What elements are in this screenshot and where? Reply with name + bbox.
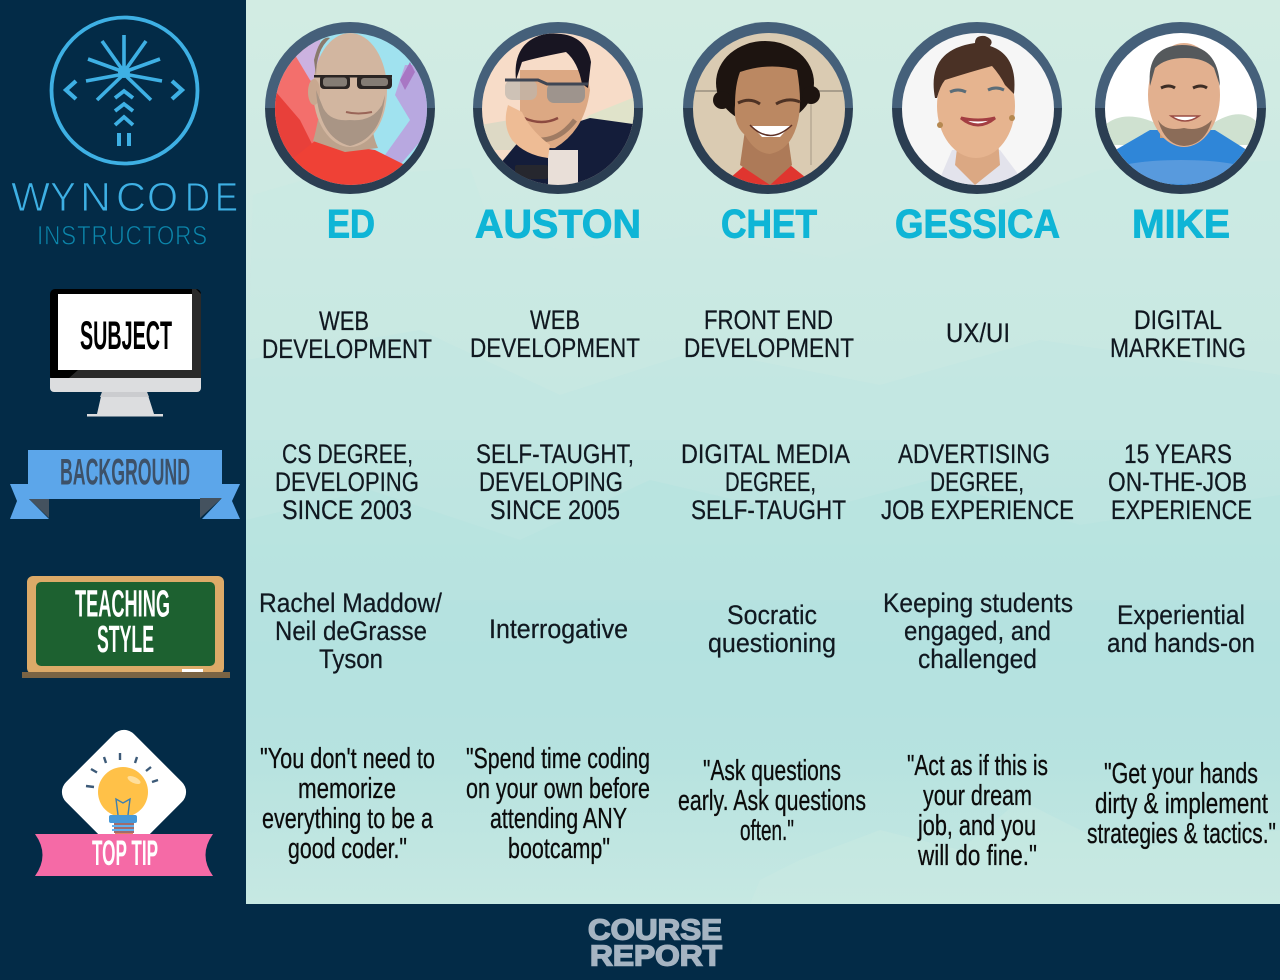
icon: ribbon, background heading [10, 450, 240, 519]
portrait: Ed [265, 22, 435, 194]
background: Chet [681, 439, 850, 525]
teaching style: Chet: Socratic [727, 600, 817, 630]
background: Chet: SELF-TAUGHT [691, 495, 846, 525]
top tip: Auston: bootcamp" [508, 833, 610, 865]
icon: lightbulb, top tip heading: TOP TIP [92, 834, 158, 873]
background: Gessica: ADVERTISING [898, 439, 1050, 469]
left sidebar [0, 0, 246, 904]
subject: Ed [262, 306, 432, 364]
icon: monitor, subject heading [50, 289, 201, 416]
instructor: Chet [683, 22, 853, 246]
logo emblem [52, 18, 198, 164]
background: Gessica: JOB EXPERIENCE [881, 495, 1074, 525]
Wyncode logo [11, 18, 238, 250]
background: Gessica [881, 439, 1074, 525]
logo wordmark [11, 174, 238, 220]
background: Auston: SELF-TAUGHT, [476, 439, 634, 469]
teaching style: Gessica: engaged, and [904, 616, 1051, 646]
background: Ed: CS DEGREE, [282, 439, 413, 469]
icon: chalkboard, teaching style heading: TEACHING [75, 584, 170, 626]
top tip: Chet [678, 755, 866, 847]
subject: Auston [470, 305, 640, 363]
logo wordmark: E [215, 174, 238, 220]
portrait: Auston [473, 22, 643, 194]
subject: Mike [1110, 305, 1246, 363]
icon: ribbon, background heading: BACKGROUND [60, 452, 190, 492]
subject: Mike: MARKETING [1110, 333, 1246, 363]
logo wordmark: D [185, 174, 210, 220]
top tip: Ed: memorize [298, 773, 396, 805]
name: Auston: AUSTON [475, 202, 641, 246]
top tip: Auston: "Spend time coding [466, 743, 650, 775]
logo subtitle: INSTRUCTORS [37, 220, 208, 250]
subject: Gessica: UX/UI [946, 318, 1010, 348]
background: Chet: DEGREE, [725, 467, 816, 497]
Course Report logo [588, 914, 722, 972]
logo wordmark: W [11, 174, 50, 220]
icon: chalkboard, teaching style heading [22, 576, 230, 678]
teaching style: Ed: Rachel Maddow/ [259, 588, 442, 618]
name: Mike: MIKE [1132, 202, 1230, 246]
teaching style: Auston: Interrogative [489, 614, 628, 644]
background: Gessica: DEGREE, [930, 467, 1024, 497]
subject: Chet: FRONT END [704, 305, 833, 335]
icon: monitor, subject heading: SUBJECT [80, 314, 172, 358]
subject: Mike: DIGITAL [1134, 305, 1222, 335]
instructor: Ed [265, 22, 435, 246]
subject: Auston: DEVELOPMENT [470, 333, 640, 363]
background: Chet: DIGITAL MEDIA [681, 439, 850, 469]
background: Auston: DEVELOPING [479, 467, 623, 497]
background: Mike: ON-THE-JOB [1108, 467, 1247, 497]
background: Mike: EXPERIENCE [1111, 495, 1252, 525]
name: Ed: ED [327, 202, 375, 246]
logo wordmark: Y [50, 174, 76, 220]
top tip: Ed: everything to be a [262, 803, 434, 835]
background: Ed: DEVELOPING [275, 467, 419, 497]
instructor: Auston [473, 22, 643, 246]
background: Auston [476, 439, 634, 525]
subject: Ed: WEB [319, 306, 369, 336]
row: subject [262, 305, 1246, 364]
teaching style: Chet: questioning [708, 628, 836, 658]
top tip: Gessica: "Act as if this is [907, 750, 1048, 782]
teaching style: Mike [1107, 600, 1255, 658]
Course Report logo: COURSE [588, 914, 722, 946]
top tip: Chet: often." [740, 815, 794, 847]
top tip: Chet: early. Ask questions [678, 785, 866, 817]
teaching style: Mike: and hands-on [1107, 628, 1255, 658]
footer bar [0, 904, 1280, 980]
top tip: Ed: "You don't need to [260, 743, 435, 775]
top tip: Gessica [907, 750, 1048, 872]
logo wordmark: N [80, 174, 111, 220]
portrait: Mike [1095, 22, 1266, 194]
background: Ed [275, 439, 419, 525]
background: Ed: SINCE 2003 [282, 495, 412, 525]
subject: Chet [684, 305, 854, 363]
top tip: Auston: on your own before [466, 773, 650, 805]
teaching style: Ed: Neil deGrasse [275, 616, 427, 646]
portrait: Chet [683, 22, 853, 194]
background: Mike [1108, 439, 1252, 525]
top tip: Mike [1087, 758, 1276, 850]
top tip: Gessica: will do fine." [917, 840, 1037, 872]
teaching style: Gessica: Keeping students [883, 588, 1073, 618]
top tip: Auston: attending ANY [490, 803, 627, 835]
background: Mike: 15 YEARS [1124, 439, 1232, 469]
icon: chalkboard, teaching style heading: STYLE [97, 619, 154, 661]
subject: Ed: DEVELOPMENT [262, 334, 432, 364]
top tip: Gessica: job, and you [917, 810, 1036, 842]
name: Chet: CHET [721, 202, 817, 246]
Course Report logo: REPORT [590, 940, 722, 972]
top tip: Ed [260, 743, 435, 865]
teaching style: Gessica [883, 588, 1073, 674]
name: Gessica: GESSICA [895, 202, 1060, 246]
row: teaching style [259, 588, 1255, 674]
top tip: Auston [466, 743, 650, 865]
instructor: Mike [1095, 22, 1266, 246]
top tip: Chet: "Ask questions [703, 755, 841, 787]
main background panel [246, 0, 1280, 904]
teaching style: Ed [259, 588, 442, 674]
row: top tip [260, 743, 1276, 872]
portrait: Gessica [892, 22, 1062, 194]
teaching style: Mike: Experiential [1117, 600, 1245, 630]
teaching style: Gessica: challenged [918, 644, 1037, 674]
background: Auston: SINCE 2005 [490, 495, 620, 525]
teaching style: Chet [708, 600, 836, 658]
subject: Auston: WEB [530, 305, 580, 335]
logo wordmark: C [116, 174, 146, 220]
row: background [275, 439, 1252, 525]
top tip: Gessica: your dream [923, 780, 1032, 812]
subject: Chet: DEVELOPMENT [684, 333, 854, 363]
teaching style: Ed: Tyson [319, 644, 383, 674]
top tip: Ed: good coder." [288, 833, 407, 865]
logo wordmark: O [147, 174, 178, 220]
instructor: Gessica [892, 22, 1062, 246]
icon: lightbulb, top tip heading [35, 724, 213, 876]
